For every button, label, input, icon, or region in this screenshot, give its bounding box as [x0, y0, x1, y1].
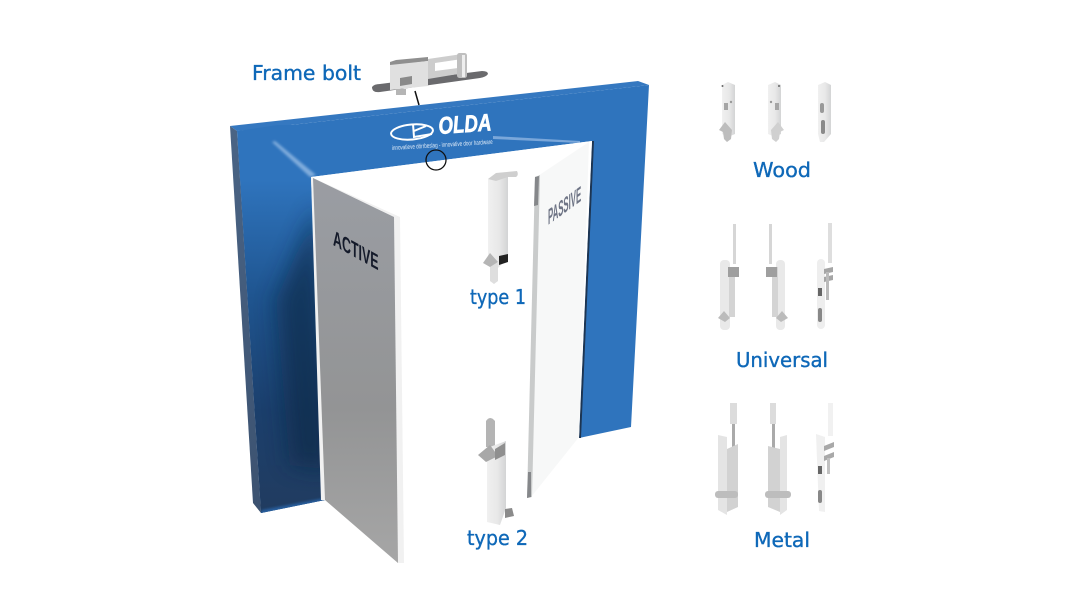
label: wood: Wood — [753, 158, 811, 182]
logo swoosh — [390, 123, 434, 141]
wood bolt 1 — [719, 82, 735, 142]
label: metal: Metal — [754, 528, 810, 552]
metal bolt 3 — [816, 403, 834, 512]
frame front face — [237, 85, 649, 513]
frame inner edge — [579, 141, 594, 438]
metal bolts — [715, 403, 834, 515]
door frame — [230, 81, 649, 516]
metal bolt 1 — [715, 403, 738, 515]
universal bolt 1 — [718, 224, 739, 330]
light beam right — [493, 136, 580, 143]
wood bolt 2 — [768, 82, 784, 142]
frame left side — [230, 126, 261, 513]
OLDA logo — [390, 109, 493, 152]
frame top surface — [230, 81, 649, 131]
logo tagline: innovatieve dörrbeslag - innovative door hardware — [392, 139, 493, 152]
marker circle — [426, 150, 446, 170]
light beam left — [272, 141, 316, 177]
active label: ACTIVE — [333, 225, 379, 275]
passive door leaf — [527, 142, 589, 498]
frame bolt hardware — [372, 53, 488, 95]
logo wordmark: OLDA — [438, 109, 492, 140]
universal bolt 2 — [766, 224, 788, 330]
wood bolt 3 — [818, 82, 831, 142]
universal bolt 3 — [817, 223, 833, 329]
label: type 2: type 2 — [467, 526, 528, 550]
connector line — [415, 91, 419, 105]
passive door face — [531, 142, 589, 497]
active door edge — [311, 177, 404, 563]
bolt type 1 — [483, 171, 518, 284]
label: universal: Universal — [736, 348, 828, 372]
metal bolt 2 — [765, 403, 791, 515]
frame left shaded leg — [237, 125, 332, 516]
passive door edge — [527, 175, 540, 498]
bolt type 2 — [478, 418, 514, 525]
label: type 1: type 1 — [470, 285, 526, 309]
wood bolts — [719, 82, 831, 142]
label: frame bolt: Frame bolt — [252, 61, 361, 85]
active door face — [313, 178, 398, 563]
opening — [311, 141, 592, 563]
universal bolts — [718, 223, 833, 330]
passive door leaf: PASSIVE — [548, 181, 581, 230]
active door leaf — [311, 177, 404, 563]
